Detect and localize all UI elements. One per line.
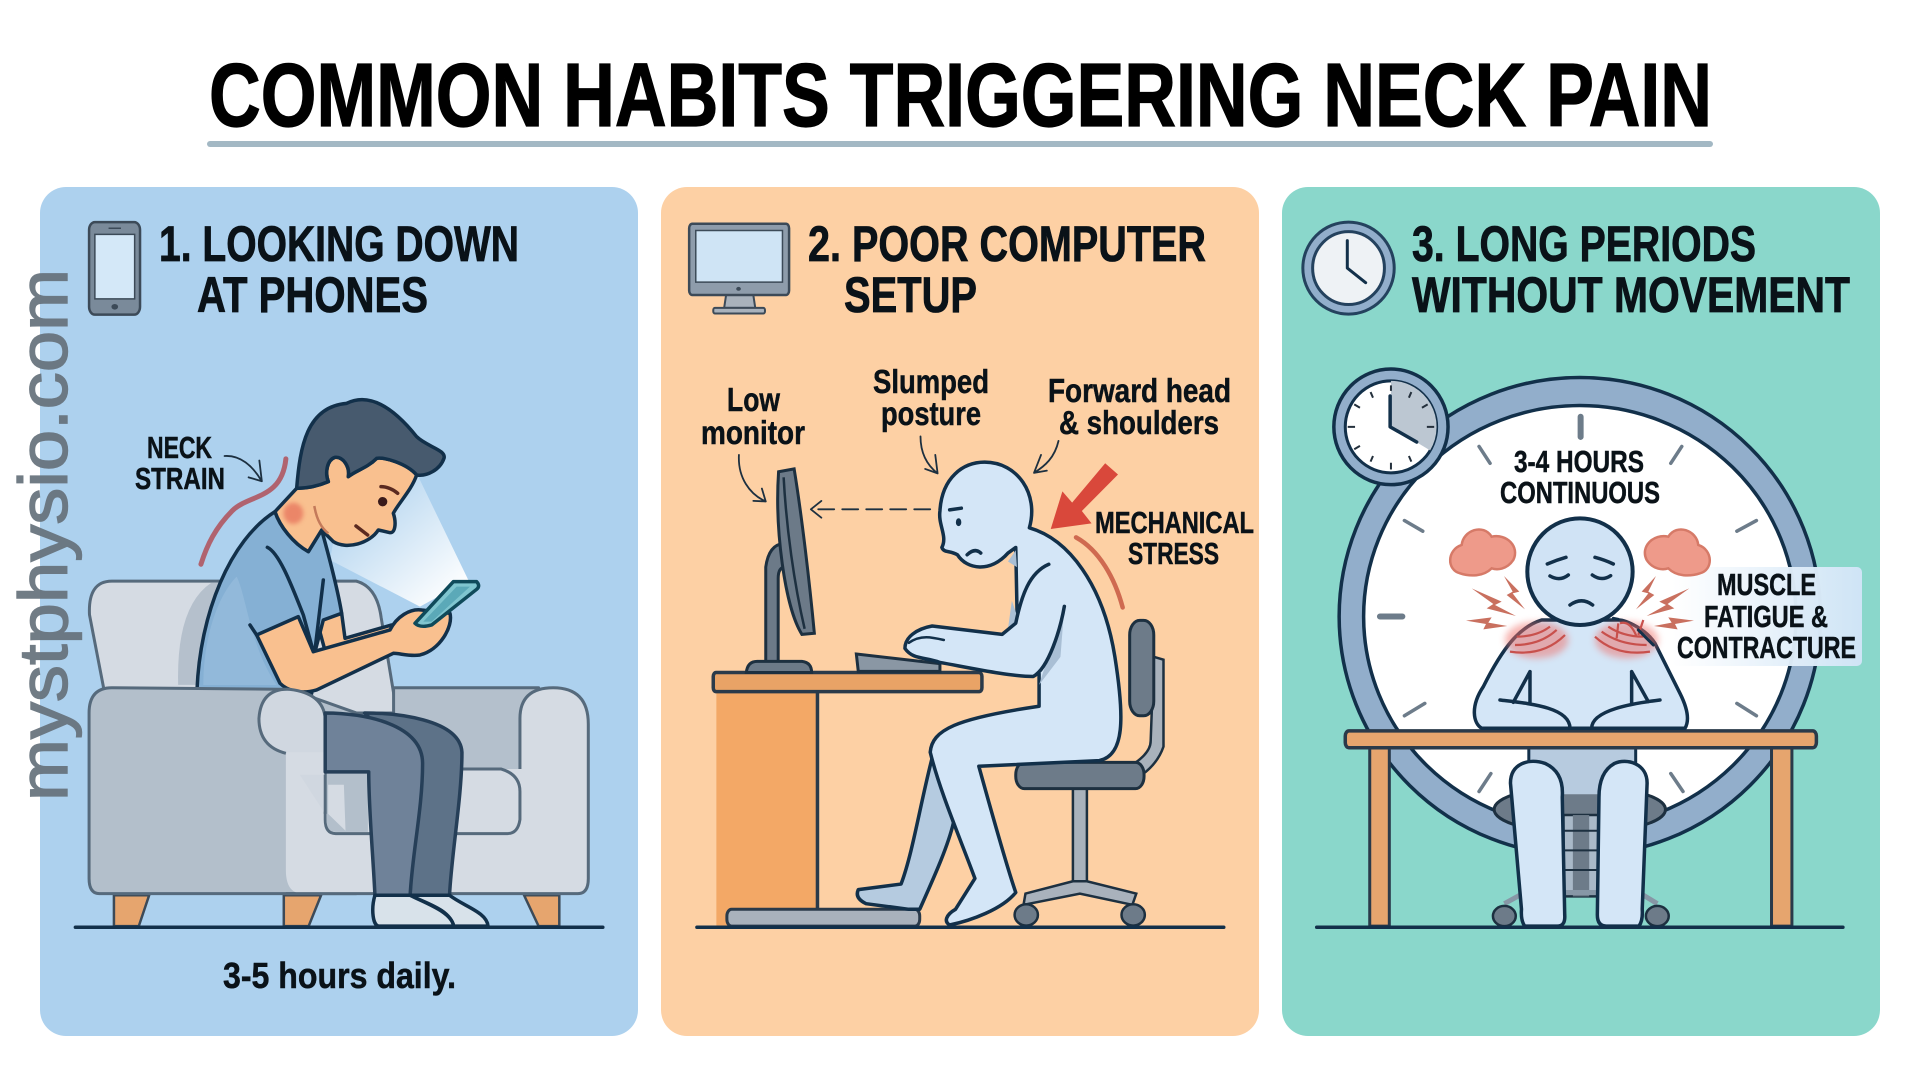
arms — [1500, 672, 1660, 728]
label: mechanical stress: STRESS — [1128, 536, 1219, 571]
icon: monitor — [689, 224, 789, 314]
label: neck strain — [135, 430, 225, 496]
shoulder soreness — [1505, 618, 1658, 658]
arrow: forward head — [1034, 441, 1059, 473]
clouds of stress — [1450, 529, 1710, 575]
label: slumped posture: Slumped — [873, 363, 989, 400]
computer monitor — [746, 469, 814, 673]
label: continuous hours: 3-4 HOURS — [1514, 444, 1644, 479]
label: forward head and shoulders: & shoulders — [1059, 404, 1219, 441]
arrow: slumped posture — [920, 436, 938, 473]
desk — [713, 673, 982, 926]
chair — [1015, 620, 1163, 926]
ground line — [697, 926, 1224, 929]
heading: poor computer setup: 2. POOR COMPUTER — [808, 216, 1206, 272]
icon: phone — [89, 222, 140, 315]
label: muscle fatigue and contracture: MUSCLE — [1717, 567, 1816, 602]
panel: poor computer setup — [661, 187, 1259, 1036]
label: forward head and shoulders: Forward head — [1048, 372, 1231, 409]
label: muscle fatigue and contracture: CONTRACTURE — [1677, 630, 1856, 665]
label: low monitor: Low — [727, 381, 780, 418]
illustration: desk, chair and slumped figure — [689, 224, 1224, 927]
figure: head and torso — [930, 462, 1121, 925]
arrow: gaze dashed line — [814, 508, 930, 510]
keyboard — [856, 654, 940, 671]
desk — [1345, 731, 1816, 926]
arrow: low monitor — [739, 455, 766, 501]
neck strain curve — [201, 459, 286, 564]
illustration: sofa and ground — [89, 581, 559, 926]
illustration: sofa front and legs — [75, 222, 603, 927]
head and face — [1527, 518, 1633, 625]
heading: long periods without movement: 3. LONG PERIODS — [1412, 216, 1756, 272]
label: slumped posture — [873, 363, 989, 432]
figure: head, torso and pain marks — [1450, 518, 1710, 728]
label: neck strain: STRAIN — [135, 461, 225, 496]
label: muscle fatigue and contracture: FATIGUE & — [1704, 599, 1828, 634]
heading: looking down at phones — [159, 216, 519, 323]
label: forward head and shoulders — [1048, 372, 1231, 441]
label: neck strain: NECK — [147, 430, 212, 465]
small wall clock — [1334, 369, 1448, 485]
label: continuous hours — [1500, 444, 1660, 510]
large clock face — [1339, 377, 1820, 855]
trousers — [365, 713, 462, 895]
label: muscle fatigue and contracture — [1677, 567, 1856, 665]
watermark: mystphysio.com — [5, 269, 82, 801]
neck redness — [283, 503, 303, 524]
light beam from phone — [330, 477, 468, 607]
arrow: mechanical stress — [1051, 463, 1118, 529]
torso — [1474, 620, 1687, 728]
figure: pelvis and legs — [1510, 747, 1647, 926]
label: low monitor: monitor — [701, 414, 805, 451]
heading: looking down at phones: 1. LOOKING DOWN — [159, 216, 519, 272]
arrow: neck strain — [225, 456, 262, 481]
label: low monitor — [701, 381, 805, 451]
caption: daily hours: 3-5 hours daily. — [223, 955, 456, 996]
label: slumped posture: posture — [881, 395, 981, 432]
ground line — [75, 926, 603, 929]
phone — [415, 582, 479, 626]
panel: long periods without movement — [1282, 187, 1880, 1036]
title underline — [207, 141, 1713, 147]
label: continuous hours: CONTINUOUS — [1500, 475, 1660, 510]
label: mechanical stress: MECHANICAL — [1095, 505, 1254, 540]
socks — [410, 895, 488, 926]
lightning marks — [1466, 576, 1694, 629]
heading: long periods without movement — [1412, 216, 1850, 323]
heading: poor computer setup: SETUP — [844, 267, 977, 323]
label: mechanical stress — [1095, 505, 1254, 571]
heading: looking down at phones: AT PHONES — [197, 267, 428, 323]
heading: poor computer setup — [808, 216, 1206, 323]
ground line — [1317, 926, 1843, 929]
hair — [297, 400, 444, 488]
label background: muscle fatigue — [1672, 567, 1862, 666]
illustration: clock, desk and seated figure — [1303, 222, 1843, 927]
figure: rear leg — [857, 758, 954, 909]
person upper body — [197, 400, 479, 693]
panel: looking down at phones — [40, 187, 638, 1036]
figure: arm — [905, 564, 1064, 676]
icon: clock — [1303, 222, 1394, 314]
chair under figure — [1493, 786, 1669, 926]
stress curve — [1076, 537, 1123, 607]
figure: face — [950, 508, 981, 555]
